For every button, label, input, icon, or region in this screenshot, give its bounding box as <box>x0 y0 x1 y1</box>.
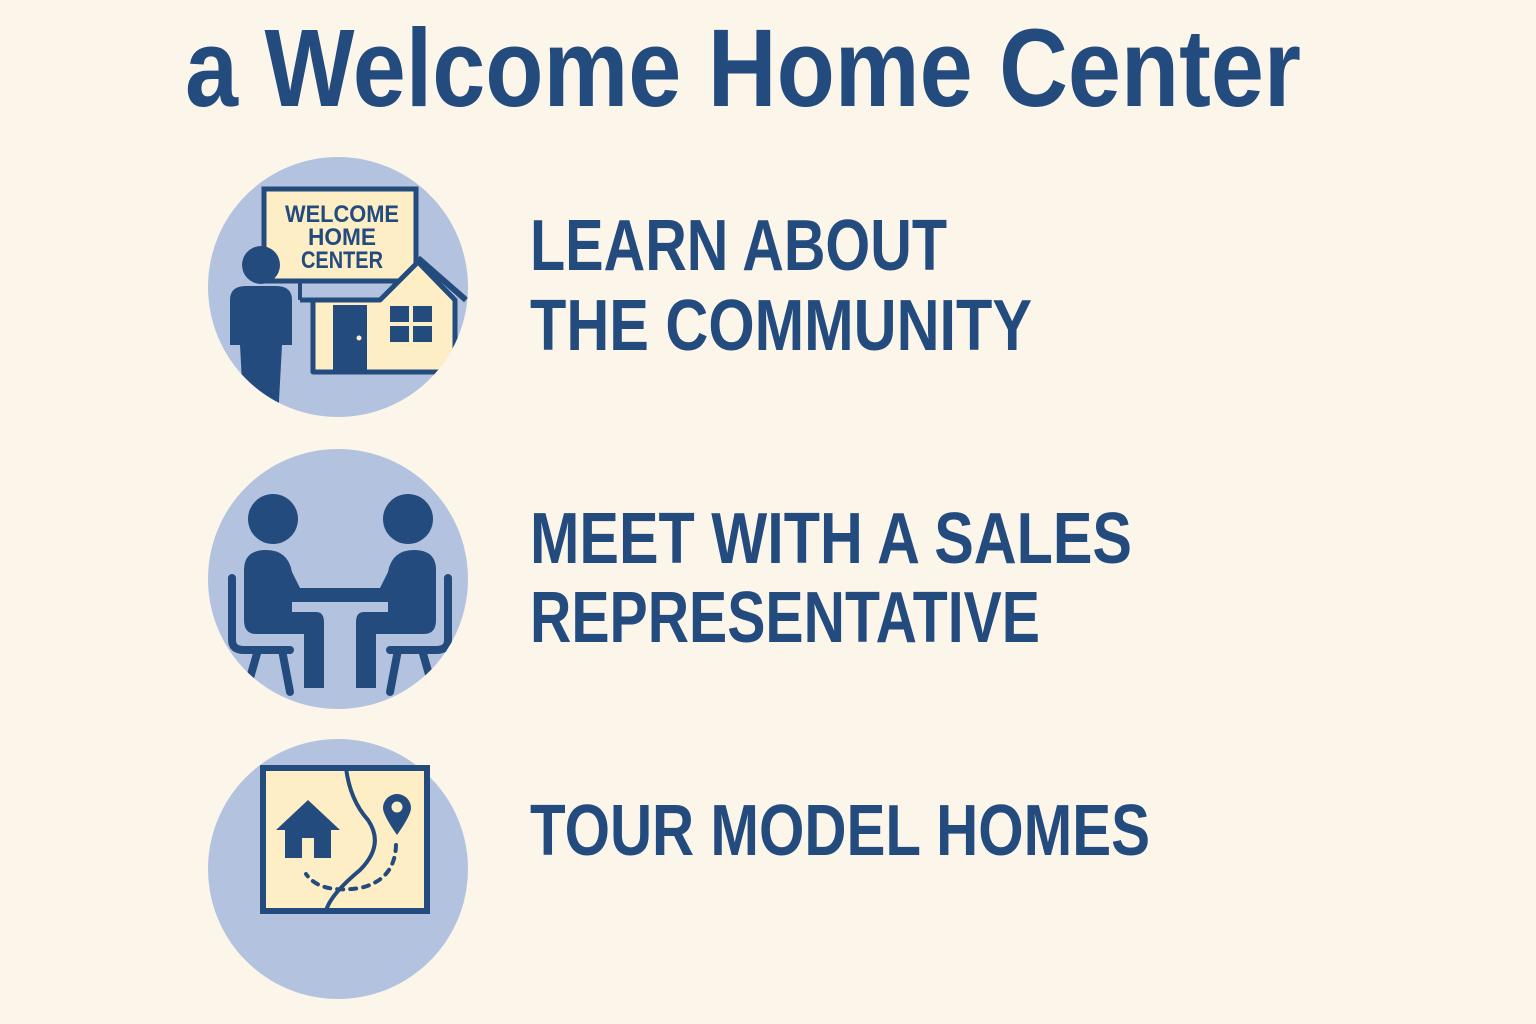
title: a Welcome Home Center <box>185 7 1301 130</box>
text: meet with a sales representative: MEET WITH A SALES <box>530 499 1132 579</box>
text: learn about the community <box>530 206 1032 366</box>
text: meet with a sales representative: REPRESENTATIVE <box>530 578 1040 658</box>
text: learn about the community: THE COMMUNITY <box>530 286 1032 366</box>
icon: map with house and pin <box>208 739 468 999</box>
text: learn about the community: LEARN ABOUT <box>530 206 947 286</box>
icon: welcome home center sign with person and house: CENTER <box>301 247 383 274</box>
text: tour model homes: TOUR MODEL HOMES <box>530 791 1150 871</box>
text: meet with a sales representative <box>530 499 1132 658</box>
icon: welcome home center sign with person and house <box>208 157 468 420</box>
icon: meeting at table <box>208 449 468 709</box>
icon: welcome home center sign with person and house: HOME <box>308 224 376 251</box>
icon: welcome home center sign with person and house: WELCOME <box>285 201 399 228</box>
